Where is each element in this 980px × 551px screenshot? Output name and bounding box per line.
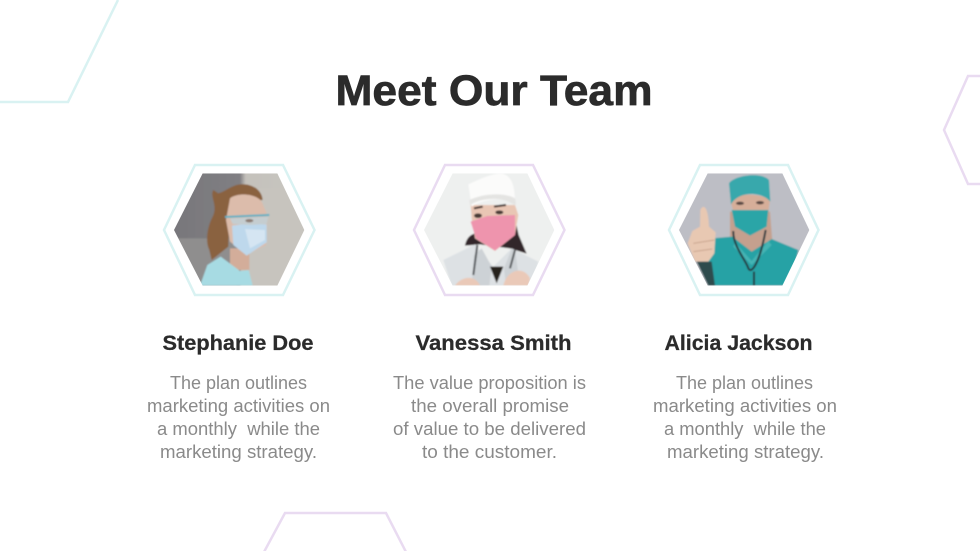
name: Stephanie Doe [162,332,314,355]
team member: Vanessa Smith [393,165,586,462]
description: of value to be delivered [393,419,586,439]
decorative hexagon: top left [0,0,118,102]
hexagon frame: teal [669,165,818,295]
team member: Alicia Jackson [653,165,837,462]
description: marketing strategy. [667,442,824,462]
decorative hexagon: bottom [264,513,406,551]
description: The plan outlines [676,373,813,393]
description: marketing activities on [653,396,837,416]
description [147,373,330,462]
hexagon frame: teal [164,165,314,295]
name: Alicia Jackson [664,332,812,355]
description: marketing activities on [147,396,330,416]
portrait: woman in blue mask and goggles [174,174,304,286]
team member: Stephanie Doe [147,165,330,462]
description: to the customer. [422,442,557,462]
description [393,373,586,462]
portrait: surgeon giving thumbs up [679,174,810,286]
description: The plan outlines [170,373,307,393]
description: the overall promise [411,396,569,416]
hexagon frame: purple [414,165,564,295]
description [653,373,837,462]
description: marketing strategy. [160,442,317,462]
description: a monthly while the [157,419,320,439]
portrait: woman in pink mask and white cap [424,174,554,286]
description: The value proposition is [393,373,586,393]
description: a monthly while the [664,419,826,439]
title: Meet Our Team [336,67,652,115]
name: Vanessa Smith [416,332,572,355]
decorative hexagon: right edge [944,76,980,184]
